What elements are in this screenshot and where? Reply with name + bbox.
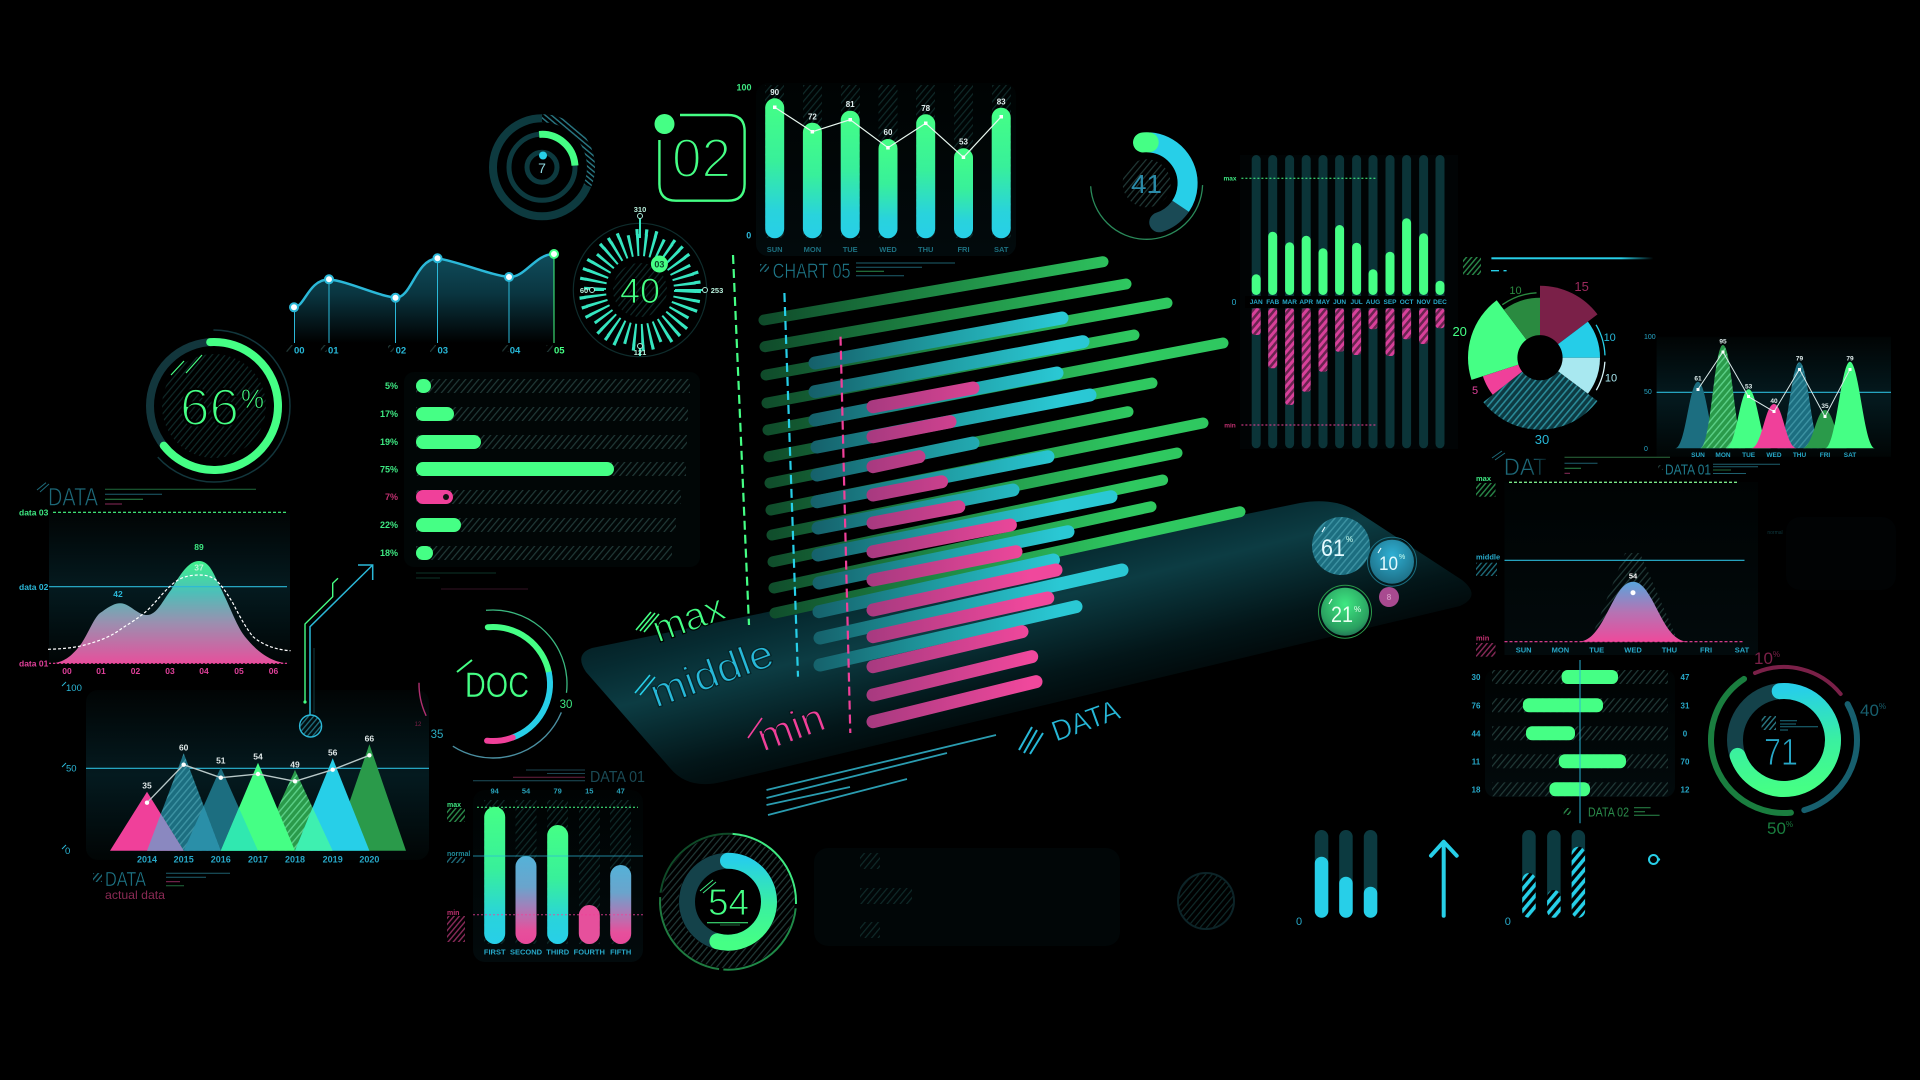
chart: DATA 01 vertical bars — [447, 769, 645, 962]
heading: DATA 01 right: DATA 01 — [1665, 461, 1711, 478]
chart: single bell with max middle min: SAT — [1735, 646, 1750, 654]
triangle chart 2014 to 2020: 2020 — [359, 854, 379, 864]
gauge: DOC: 12 — [415, 722, 422, 728]
chart: weekly bell curves: 95 — [1719, 338, 1727, 346]
chart: monthly up and down bars: SEP — [1383, 299, 1397, 306]
chart: DATA 02 range bars: 18 — [1472, 785, 1481, 794]
chart: DATA 02 range bars: 70 — [1681, 757, 1690, 766]
chart: weekly vertical bars: 83 — [997, 98, 1006, 106]
chart: DATA 02 range bars: 30 — [1472, 673, 1481, 682]
icon box 02 — [654, 114, 745, 201]
heading: DATA left: DATA — [48, 484, 98, 512]
chart: single bell with max middle min: MON — [1552, 646, 1569, 654]
heading: DATA left — [37, 483, 256, 512]
dim hatched circle — [1178, 873, 1234, 929]
chart: weekly bell curves — [1644, 334, 1891, 459]
icon box 02: 02 — [672, 127, 731, 189]
chart: weekly vertical bars: 78 — [921, 104, 931, 113]
gauge: radial dial 40: 03 — [654, 260, 664, 270]
area chart: data 01 to data 03: 00 — [62, 666, 72, 676]
chart: monthly up and down bars: JUL — [1350, 299, 1363, 306]
arrow: up — [1431, 842, 1457, 916]
triangle chart 2014 to 2020 — [62, 682, 429, 864]
bubbles: 61, 10, 21, 8 percent: 10 — [1379, 554, 1398, 575]
gauge: radial dial 40: 40 — [620, 272, 660, 311]
chart: weekly bell curves: SUN — [1691, 452, 1705, 459]
chart: weekly bell curves: TUE — [1742, 452, 1756, 459]
area chart: data 01 to data 03 — [19, 508, 291, 676]
gauge: radial dial 40: 121 — [634, 348, 646, 357]
mini bars: solid: 0 — [1296, 916, 1302, 928]
chart: single bell with max middle min: max — [1476, 474, 1492, 483]
mini bars: solid — [1296, 830, 1377, 928]
chart: DATA 01 vertical bars: FIRST — [484, 948, 506, 956]
chart: monthly up and down bars: 0 — [1232, 297, 1237, 307]
bubbles: 61, 10, 21, 8 percent: 8 — [1387, 593, 1392, 602]
triangle chart 2014 to 2020: 51 — [216, 756, 226, 766]
horizontal progress bars panel: 18% — [380, 548, 398, 558]
chart: weekly bell curves: 50 — [1644, 389, 1652, 396]
chart: weekly bell curves: 35 — [1821, 403, 1829, 410]
chart: weekly vertical bars: 90 — [770, 88, 780, 97]
chart: DATA 01 vertical bars: DATA 01 — [590, 769, 645, 786]
chart: weekly vertical bars: 0 — [746, 230, 751, 240]
area chart: data 01 to data 03: data 03 — [19, 508, 49, 518]
bubbles: 61, 10, 21, 8 percent — [1312, 517, 1416, 638]
chart: monthly up and down bars: JAN — [1250, 299, 1263, 306]
chart: single bell with max middle min: middle — [1476, 552, 1500, 562]
threshold dashed lines — [733, 255, 850, 733]
chart: DATA 01 vertical bars: normal — [447, 851, 470, 858]
area chart: data 01 to data 03: data 01 — [19, 658, 49, 668]
pie chart with labels: 5 — [1472, 385, 1478, 397]
pie chart with labels: 30 — [1535, 432, 1549, 447]
gauge: 71 with outer ring labels: % — [1879, 702, 1886, 711]
labels: max middle min: max — [647, 587, 731, 651]
heading: DAT faded: DAT — [1504, 454, 1547, 481]
triangle chart 2014 to 2020: 49 — [290, 760, 300, 770]
chart: weekly bell curves: MON — [1715, 452, 1731, 459]
gauge: 41: 41 — [1131, 169, 1162, 199]
gauge: concentric rings 7 — [493, 118, 591, 216]
chart: DATA 01 vertical bars: min — [447, 910, 459, 917]
triangle chart 2014 to 2020: 60 — [179, 743, 189, 753]
triangle chart 2014 to 2020: 2018 — [285, 854, 305, 864]
bubbles: 61, 10, 21, 8 percent: % — [1354, 605, 1361, 614]
chart: weekly bell curves: 79 — [1796, 356, 1803, 362]
chart: DATA 01 vertical bars: THIRD — [546, 948, 570, 956]
chart: monthly up and down bars: FAB — [1266, 299, 1280, 306]
gauge: 66 percent: 66 — [180, 379, 239, 437]
gauge: DOC: 30 — [560, 699, 572, 711]
pie chart with labels: 15 — [1574, 279, 1589, 294]
line chart with points 00 to 05: 02 — [396, 346, 406, 356]
pie chart with labels: 20 — [1452, 324, 1467, 339]
heading: DATA 01 right — [1658, 461, 1780, 478]
dim ghost panel: normal — [1767, 530, 1783, 536]
chart: weekly vertical bars — [736, 82, 1016, 256]
chart: weekly vertical bars: MON — [804, 245, 821, 254]
triangle chart 2014 to 2020: 2015 — [174, 854, 194, 864]
label: slanted DATA with lines: DATA — [1047, 694, 1125, 748]
chart: weekly bell curves: FRI — [1820, 452, 1830, 459]
area chart: data 01 to data 03: 01 — [96, 666, 106, 676]
chart: single bell with max middle min: FRI — [1700, 646, 1712, 654]
area chart: data 01 to data 03: 03 — [165, 666, 175, 676]
chart: monthly up and down bars: JUN — [1333, 299, 1346, 306]
triangle chart 2014 to 2020: 56 — [328, 748, 338, 758]
area chart: data 01 to data 03: 06 — [269, 666, 278, 676]
chart: weekly bell curves: 61 — [1694, 376, 1702, 382]
chart: DATA 02 range bars: 47 — [1681, 673, 1690, 682]
chart: DATA 02 range bars: 12 — [1681, 785, 1690, 794]
line chart with points 00 to 05: 01 — [328, 346, 339, 356]
chart: single bell with max middle min: WED — [1624, 646, 1642, 654]
chart: monthly up and down bars: MAR — [1282, 299, 1297, 306]
pie chart with labels: 10 — [1605, 372, 1617, 384]
chart: DATA 01 vertical bars: FOURTH — [574, 948, 605, 956]
chart: weekly bell curves: 0 — [1644, 446, 1648, 453]
chart: monthly up and down bars: NOV — [1417, 299, 1431, 306]
gauge: 71 with outer ring labels: 50 — [1767, 819, 1786, 838]
chart: DATA 01 vertical bars: FIFTH — [610, 948, 631, 956]
chart: monthly up and down bars: OCT — [1400, 299, 1413, 306]
triangle chart 2014 to 2020: 0 — [65, 846, 70, 857]
chart: weekly vertical bars: SAT — [994, 245, 1009, 254]
pie chart with labels: 10 — [1604, 332, 1616, 344]
gauge: 66 percent: % — [241, 384, 264, 414]
chart: weekly vertical bars: 53 — [959, 138, 968, 146]
horizontal progress bars panel: 17% — [380, 409, 398, 419]
chart: monthly up and down bars: min — [1224, 422, 1236, 430]
chart: weekly bell curves: 40 — [1770, 398, 1778, 405]
gauge: radial dial 40: 310 — [634, 205, 646, 214]
chart: DATA 02 range bars: 11 — [1472, 757, 1481, 766]
area chart: data 01 to data 03: 04 — [199, 666, 209, 676]
chart: weekly vertical bars: 72 — [808, 112, 817, 122]
line chart with points 00 to 05 — [286, 250, 565, 356]
horizontal progress bars panel — [380, 372, 700, 589]
chart: DATA 02 range bars — [1472, 660, 1690, 823]
gauge: 71 with outer ring labels: 10 — [1754, 649, 1773, 668]
chart: DATA 01 vertical bars: 54 — [522, 786, 531, 796]
chart: DATA 02 range bars: 0 — [1683, 729, 1688, 738]
area chart: data 01 to data 03: 37 — [194, 562, 204, 572]
chart: monthly up and down bars: max — [1223, 176, 1237, 182]
chart: DATA 02 range bars: DATA 02 — [1588, 804, 1629, 820]
label: slanted DATA with lines — [766, 694, 1125, 815]
gauge: 54: 54 — [708, 882, 749, 923]
dim ghost panel — [1767, 517, 1896, 590]
heading: DAT faded — [1492, 451, 1670, 481]
gauge: DOC: DOC — [465, 666, 529, 705]
gauge: 71 with outer ring labels: 40 — [1860, 701, 1879, 720]
chart: DATA 01 vertical bars: max — [447, 802, 461, 809]
horizontal progress bars panel: 75% — [380, 464, 398, 474]
triangle chart 2014 to 2020: 2019 — [323, 854, 343, 864]
chart: DATA 01 vertical bars: SECOND — [510, 948, 543, 956]
gauge: 71 with outer ring labels: % — [1773, 650, 1780, 659]
chart: slanted max middle min bars — [764, 262, 1240, 722]
chart: single bell with max middle min: TUE — [1589, 646, 1604, 654]
gauge: 71 with outer ring labels: 71 — [1764, 732, 1798, 774]
chart: monthly up and down bars — [1223, 155, 1458, 449]
green max bars — [764, 262, 1240, 613]
line chart with points 00 to 05: 03 — [438, 346, 448, 356]
chart: weekly vertical bars: FRI — [957, 245, 970, 254]
labels: max middle min: min — [751, 696, 831, 760]
chart: weekly vertical bars: 60 — [884, 128, 893, 137]
chart: weekly vertical bars: TUE — [843, 245, 858, 254]
chart: DATA 02 range bars: 76 — [1472, 701, 1481, 710]
bubbles: 61, 10, 21, 8 percent: 21 — [1331, 602, 1353, 627]
horizontal progress bars panel: 5% — [385, 381, 398, 391]
line chart with points 00 to 05: 00 — [294, 346, 305, 356]
gauge: radial dial 40: 253 — [711, 286, 723, 295]
gauge: 54 — [651, 825, 805, 979]
triangle chart 2014 to 2020: 2016 — [211, 854, 231, 864]
line chart with points 00 to 05: 05 — [554, 346, 565, 356]
gauge: radial dial 40: 60 — [580, 286, 588, 295]
labels: max middle min — [635, 587, 831, 760]
horizontal progress bars panel: 7% — [385, 492, 398, 502]
chart: weekly vertical bars: WED — [879, 245, 897, 254]
chart: monthly up and down bars: AUG — [1366, 299, 1380, 306]
chart: DATA 01 vertical bars: 94 — [491, 786, 500, 796]
icon: small ring — [1649, 855, 1660, 864]
chart: DATA 01 vertical bars: 47 — [617, 786, 625, 796]
gauge: DOC: 35 — [431, 729, 443, 741]
chart: single bell with max middle min: THU — [1662, 646, 1677, 654]
chart: DATA 02 range bars: 31 — [1681, 701, 1690, 710]
chart: weekly bell curves: THU — [1793, 452, 1806, 459]
panel: tilted platform — [581, 501, 1472, 784]
heading: DATA actual data: DATA — [105, 869, 147, 891]
chart: single bell with max middle min: SUN — [1516, 646, 1532, 654]
chart: weekly bell curves: 100 — [1644, 334, 1656, 341]
chart: monthly up and down bars: APR — [1299, 299, 1313, 306]
pink min bars — [873, 388, 1056, 722]
chart: weekly bell curves: WED — [1766, 452, 1782, 459]
bubbles: 61, 10, 21, 8 percent: 61 — [1321, 535, 1345, 562]
chart: DATA 01 vertical bars: 79 — [554, 786, 562, 796]
triangle chart 2014 to 2020: 66 — [365, 733, 374, 743]
triangle chart 2014 to 2020: 2014 — [137, 854, 157, 864]
chart: DATA 02 range bars: 44 — [1472, 729, 1481, 738]
bubbles: 61, 10, 21, 8 percent: % — [1346, 535, 1353, 544]
triangle chart 2014 to 2020: 35 — [142, 781, 152, 791]
triangle chart 2014 to 2020: 50 — [66, 764, 77, 774]
heading: DATA actual data: actual data — [105, 888, 165, 902]
pie chart with labels — [1449, 257, 1653, 448]
arrow: rising connector with hatched node — [300, 565, 373, 737]
chart: weekly bell curves: 79 — [1846, 356, 1854, 362]
heading: DATA actual data — [93, 869, 230, 902]
triangle chart 2014 to 2020: 2017 — [248, 854, 268, 864]
pie chart with labels: 10 — [1509, 285, 1522, 297]
chart: single bell with max middle min — [1476, 474, 1758, 657]
chart: DATA 01 vertical bars: 15 — [585, 786, 593, 796]
heading: CHART 05: CHART 05 — [773, 260, 851, 283]
labels: max middle min: middle — [644, 631, 779, 716]
chart: single bell with max middle min: 54 — [1629, 572, 1638, 580]
heading: CHART 05 — [760, 260, 955, 283]
chart: monthly up and down bars: DEC — [1433, 299, 1447, 306]
area chart: data 01 to data 03: 42 — [113, 589, 123, 599]
chart: single bell with max middle min: min — [1476, 634, 1490, 642]
gauge: DOC — [395, 586, 591, 782]
gauge: 41 — [1089, 125, 1205, 241]
triangle chart 2014 to 2020: 54 — [253, 752, 263, 762]
area chart: data 01 to data 03: 89 — [194, 542, 204, 552]
bubbles: 61, 10, 21, 8 percent: % — [1399, 554, 1405, 561]
chart: weekly bell curves: 53 — [1745, 384, 1753, 390]
horizontal progress bars panel: 19% — [380, 437, 398, 447]
area chart: data 01 to data 03: 05 — [234, 666, 244, 676]
mini bars: hatched: 0 — [1505, 916, 1511, 928]
chart: weekly bell curves: SAT — [1844, 452, 1856, 459]
chart: weekly vertical bars: THU — [918, 245, 933, 254]
triangle chart 2014 to 2020: 100 — [66, 683, 82, 694]
teal middle bars — [815, 318, 1122, 665]
chart: weekly vertical bars: 81 — [846, 100, 855, 109]
gauge: 66 percent — [138, 330, 290, 482]
area chart: data 01 to data 03: data 02 — [19, 582, 49, 592]
horizontal progress bars panel: 22% — [380, 520, 398, 530]
chart: weekly vertical bars: 100 — [736, 82, 752, 92]
dim placeholder panel — [814, 848, 1120, 946]
line chart with points 00 to 05: 04 — [510, 346, 521, 356]
gauge: 71 with outer ring labels: % — [1786, 820, 1793, 829]
gauge: radial dial 40 — [573, 205, 723, 357]
chart: weekly vertical bars: SUN — [767, 245, 783, 254]
gauge: concentric rings 7: 7 — [538, 160, 546, 176]
area chart: data 01 to data 03: 02 — [131, 666, 140, 676]
chart: monthly up and down bars: MAY — [1316, 299, 1331, 306]
mini bars: hatched — [1505, 830, 1585, 928]
gauge: 71 with outer ring labels — [1685, 641, 1886, 839]
